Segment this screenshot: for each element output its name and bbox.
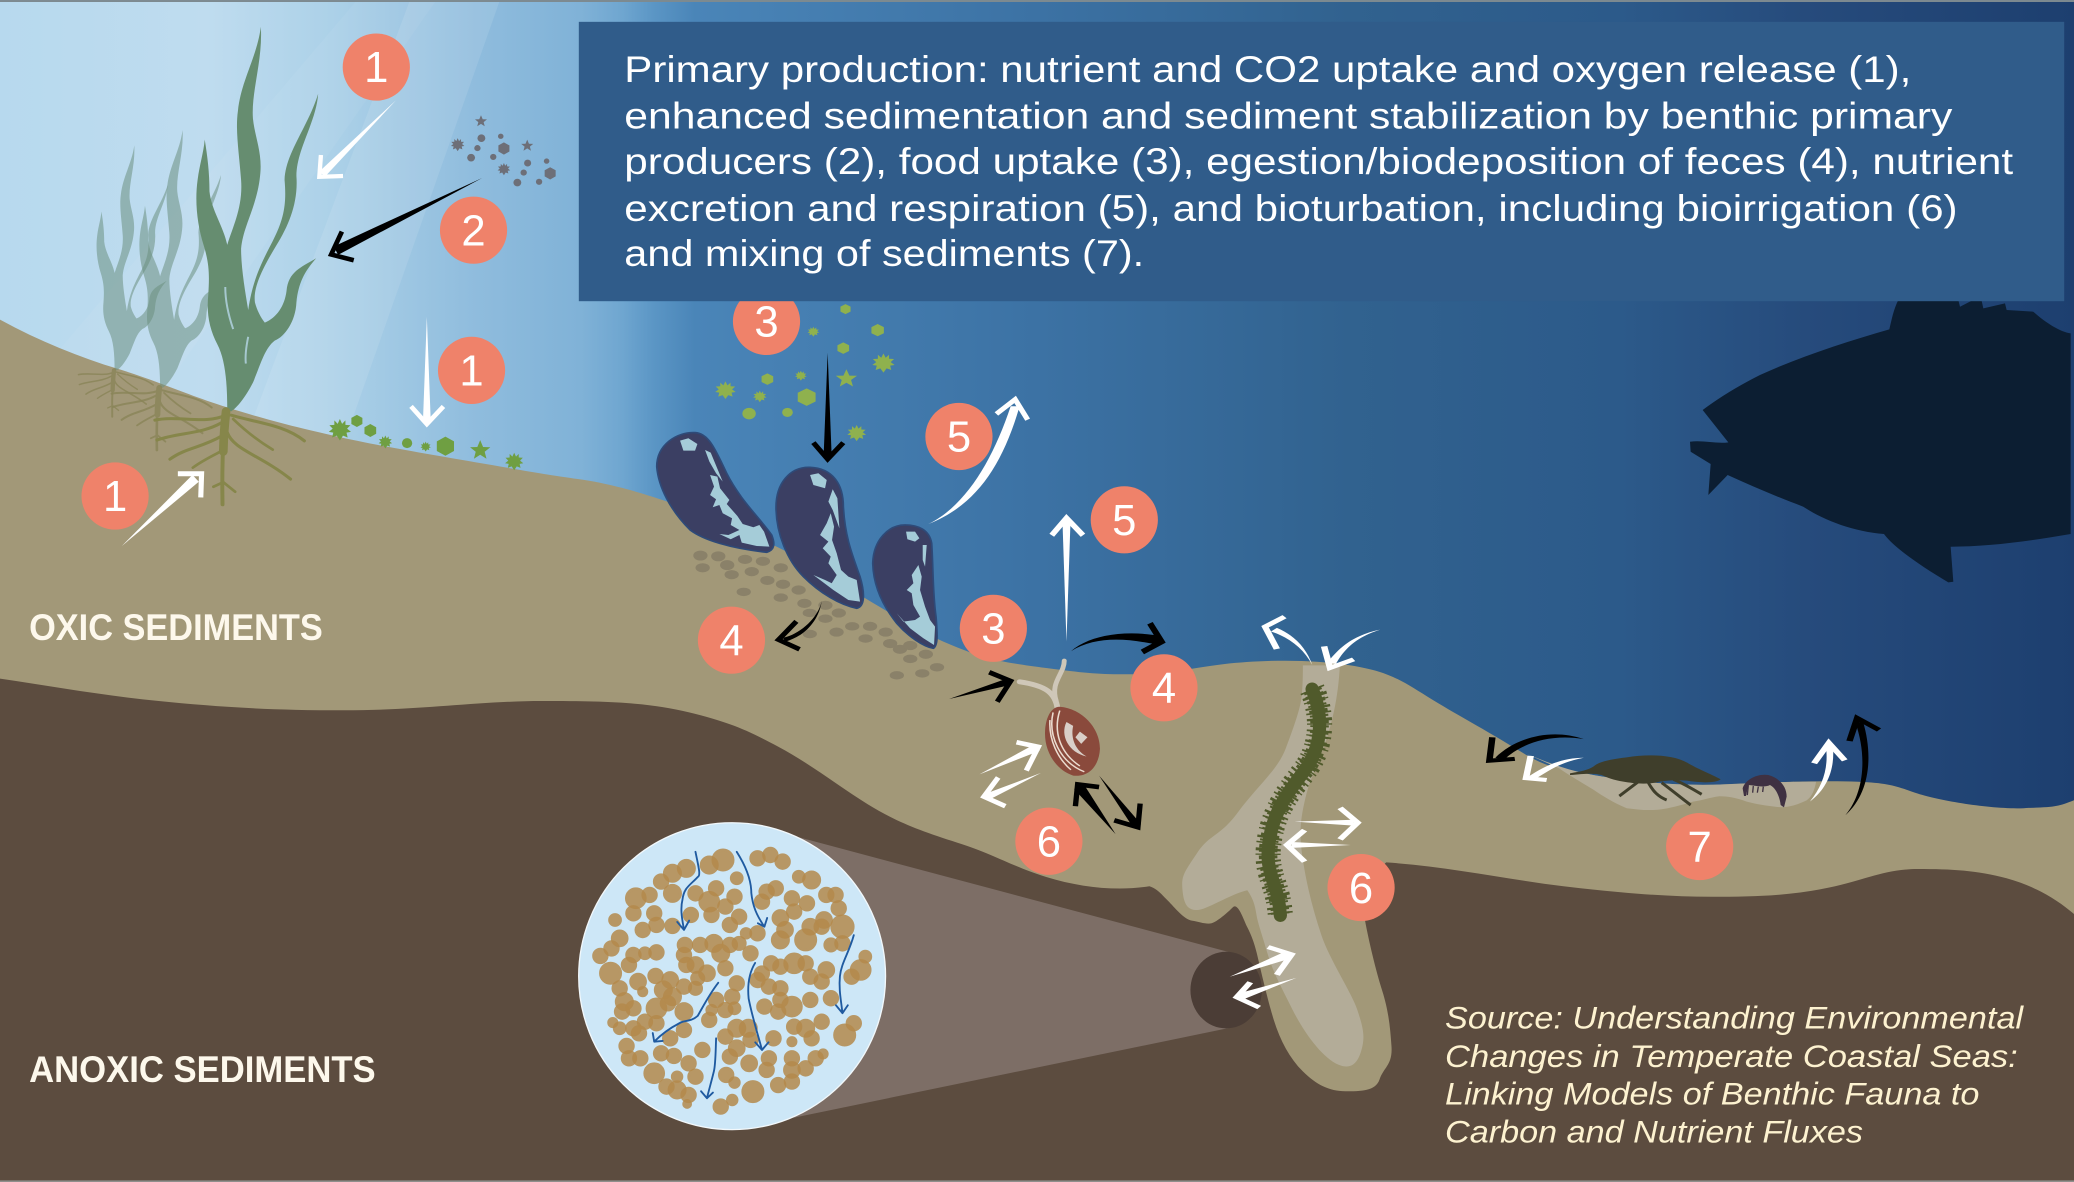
- badge 7: sediment mixing: [1666, 813, 1733, 880]
- label: oxic sediments: OXIC SEDIMENTS: [29, 606, 323, 648]
- badge 6: clam: [1015, 808, 1083, 875]
- description paragraph: producers (2), food uptake (3), egestion/biodeposition of feces (4), nutrient: [624, 140, 2014, 182]
- badge 4: mussels: [698, 607, 765, 674]
- arrows: clam bioirrigation, white pair: [979, 742, 1041, 806]
- clam and arrows around mussels and clam: [779, 353, 1162, 834]
- burrow arrows: [1230, 617, 1879, 1008]
- suspended particles near seagrass: [451, 115, 556, 186]
- settled microalgae on the seabed: [329, 415, 523, 470]
- mussels: [657, 433, 937, 648]
- seagrass: faded background plants: [78, 130, 221, 450]
- arrow: excretion from clam: [1052, 518, 1083, 642]
- badge 6: clam: 6: [1037, 817, 1061, 866]
- description paragraph: [624, 48, 2014, 274]
- disturbed sediment under crustaceans: [1521, 751, 1816, 810]
- badge 3: mussels: 3: [754, 298, 779, 347]
- source citation: Linking Models of Benthic Fauna to: [1445, 1076, 1979, 1112]
- badge 4: clam: 4: [1152, 664, 1176, 713]
- arrow: black mixing right: [1845, 718, 1879, 815]
- mussel 1: [657, 433, 774, 552]
- clam with siphons: [1020, 661, 1100, 776]
- arrow: sedimentation: [331, 178, 482, 260]
- suspended phytoplankton: [715, 304, 895, 441]
- arrow: food uptake by mussels: [813, 353, 843, 459]
- badge 1: roots: [81, 462, 149, 530]
- badge 3: clam: [960, 595, 1027, 662]
- number badges: [81, 33, 1733, 921]
- oxic sediment layer: [0, 320, 2074, 1182]
- icon: shrimp: [1570, 755, 1721, 805]
- arrows: burrow outflow and inflow: [1265, 617, 1380, 668]
- arrow: clam food uptake: [949, 672, 1011, 702]
- sediment grains: [594, 848, 871, 1113]
- arrow: white mixing left: [1526, 756, 1584, 780]
- source citation: [1445, 1000, 2024, 1150]
- badge 1: microalgae: [438, 337, 505, 404]
- badge 6: worm: 6: [1349, 864, 1373, 913]
- arrow: white mixing right: [1810, 743, 1845, 802]
- source citation: Changes in Temperate Coastal Seas:: [1445, 1038, 2018, 1074]
- arrow: uptake through roots: [122, 474, 202, 546]
- arrow: egestion from clam: [1071, 623, 1162, 652]
- arrow: nutrient uptake from water: [319, 100, 396, 177]
- magnified sediment core: [1190, 952, 1262, 1028]
- worm in burrow: [1268, 689, 1320, 915]
- description paragraph: enhanced sedimentation and sediment stabilization by benthic primary: [624, 94, 1953, 136]
- crustaceans: [1570, 755, 1787, 807]
- panel: magnified pore-water lens: [579, 823, 886, 1130]
- badge 4: mussels: 4: [719, 616, 744, 665]
- badge 4: clam: [1130, 654, 1198, 721]
- mussel 3: [873, 525, 937, 648]
- badge 3: mussels: [733, 288, 800, 355]
- badge 3: clam: 3: [981, 605, 1005, 654]
- seagrass: main plant with roots: [155, 27, 318, 504]
- badge 1: microalgae: 1: [459, 347, 484, 396]
- arrows: burrow wall exchange: [1230, 947, 1296, 1008]
- description paragraph: Primary production: nutrient and CO2 uptake and oxygen release (1),: [624, 48, 1911, 90]
- badge 2: 2: [461, 206, 486, 255]
- arrow: mussel biodeposition: [779, 601, 822, 649]
- source citation: Source: Understanding Environmental: [1445, 1000, 2024, 1036]
- badge 1: water uptake: 1: [364, 43, 388, 92]
- badge 7: sediment mixing: 7: [1688, 823, 1712, 872]
- pellets and phytoplankton: [693, 304, 944, 680]
- anoxic sediment layer: [0, 679, 2074, 1182]
- description paragraph: and mixing of sediments (7).: [624, 232, 1144, 274]
- icon: amphipod: [1743, 775, 1787, 807]
- arrows: clam bioirrigation, black pair: [1074, 776, 1141, 834]
- description paragraph: excretion and respiration (5), and bioturbation, including bioirrigation (6): [624, 187, 1958, 229]
- arrow: black mixing left: [1489, 734, 1584, 761]
- light rays: [53, 0, 500, 443]
- badge 1: roots: 1: [103, 472, 127, 521]
- magnifier cone: [794, 837, 1230, 1118]
- mussel 2: [776, 467, 863, 608]
- arrow: uptake by microalgae: [411, 317, 443, 424]
- badge 5: mussels: [925, 403, 993, 470]
- label: anoxic sediments: ANOXIC SEDIMENTS: [29, 1048, 376, 1090]
- arrow: excretion from mussels: [928, 399, 1028, 524]
- badge 5: mussels: 5: [947, 413, 971, 462]
- badge 5: clam: [1091, 486, 1158, 553]
- water flow arrows in pores: [653, 852, 854, 1098]
- badge 2: [440, 197, 507, 264]
- badge 6: worm: [1327, 854, 1395, 921]
- fish silhouette: [1690, 300, 2071, 582]
- badge 5: clam: 5: [1112, 496, 1136, 545]
- burrow: irrigated sediment: [1182, 665, 1363, 1067]
- arrows around seagrass: [122, 100, 482, 546]
- source citation: Carbon and Nutrient Fluxes: [1445, 1114, 1863, 1150]
- faecal pellets: [693, 551, 944, 680]
- panel: description text box: [579, 22, 2064, 301]
- badge 1: water uptake: [343, 33, 410, 101]
- arrows: worm bioirrigation: [1287, 808, 1358, 862]
